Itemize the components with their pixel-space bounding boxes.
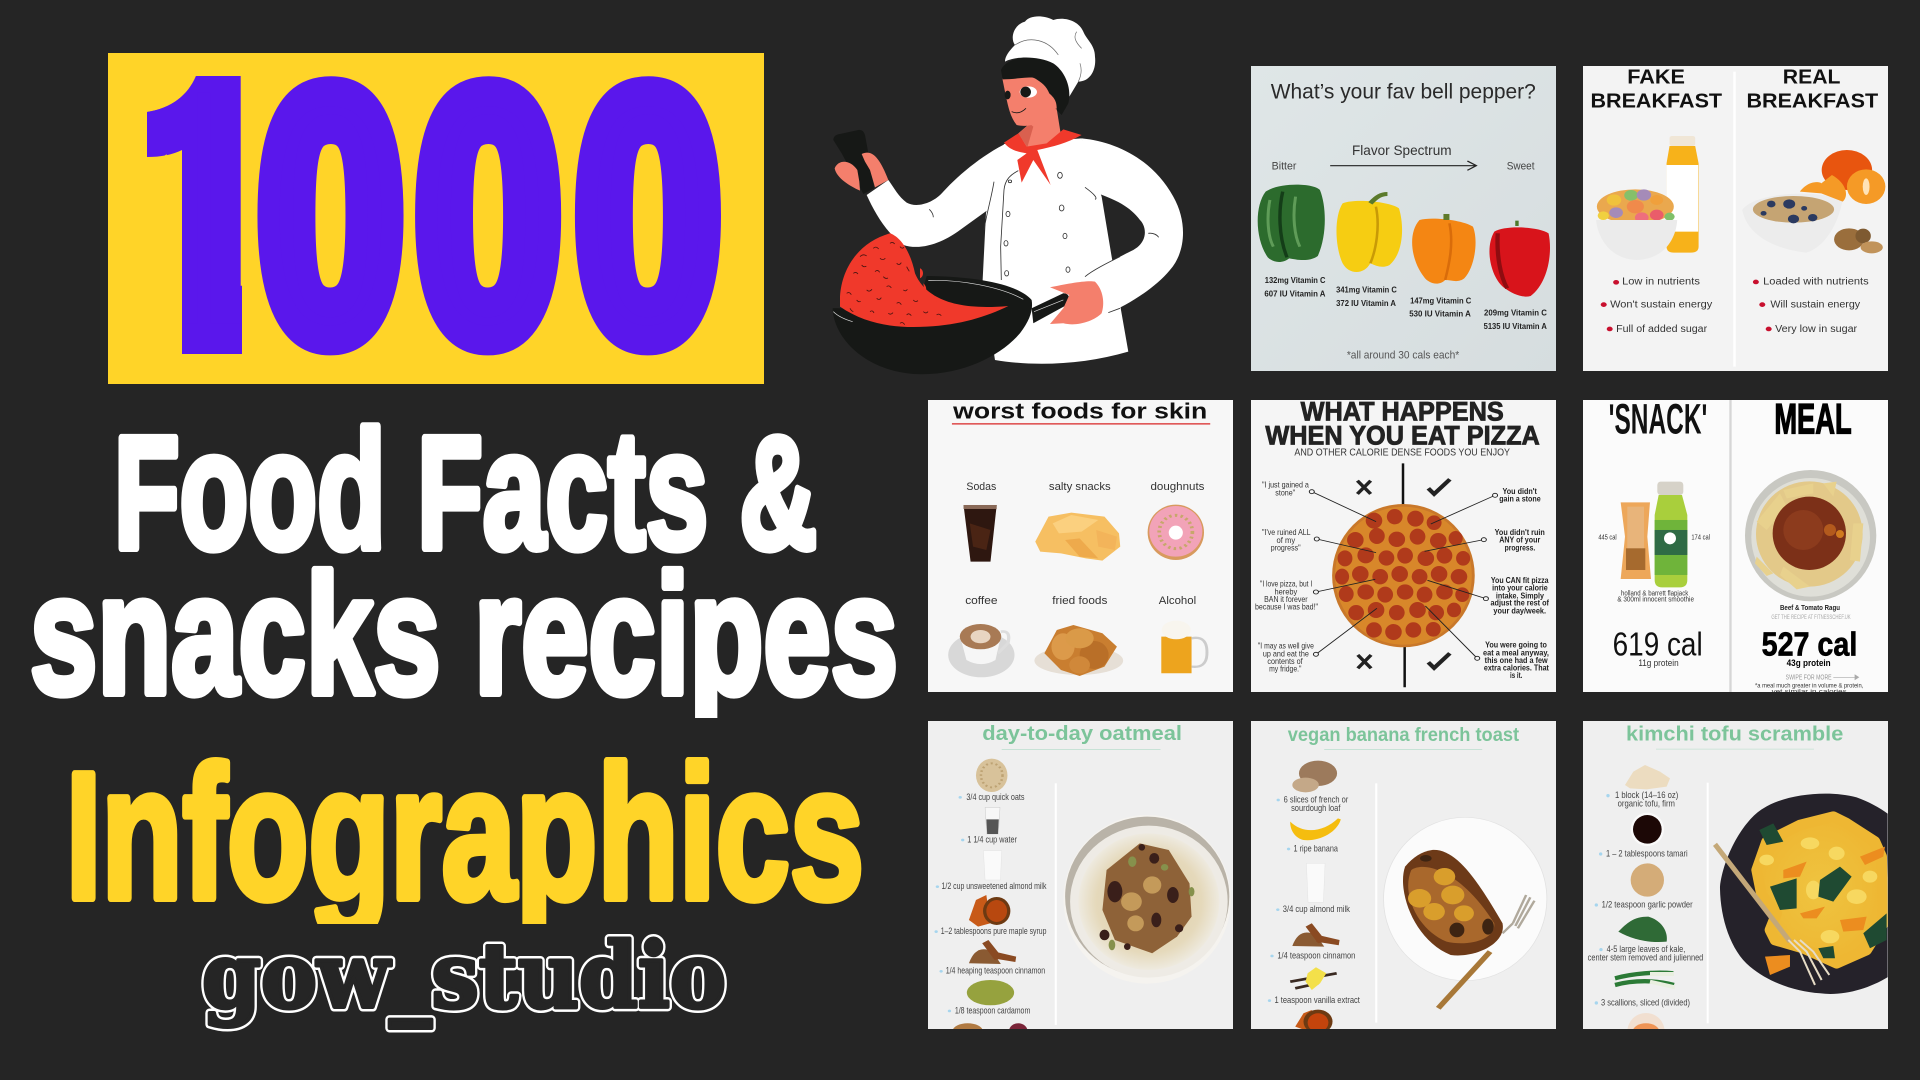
- icon: milk glass: [983, 851, 1002, 880]
- heading underline: [1324, 749, 1482, 750]
- divider: [1729, 400, 1732, 692]
- heading: fake breakfast: BREAKFAST: [1590, 89, 1722, 112]
- panel: day-to-day oatmeal: [928, 721, 1233, 1038]
- left quotes: BAN it forever: [1264, 595, 1308, 604]
- vitamin values: 209mg Vitamin C: [1484, 309, 1547, 318]
- orange and slices: [1800, 150, 1885, 204]
- list: fake breakfast: Low in nutrients: [1622, 277, 1700, 287]
- left quotes: "I've ruined ALL: [1262, 528, 1311, 537]
- dark plate with tofu scramble: [1715, 794, 1898, 994]
- vitamin values: 372 IU Vitamin A: [1336, 299, 1396, 309]
- sauce drops: [920, 268, 937, 303]
- right answers: adjust the rest of: [1490, 599, 1550, 607]
- panel: snack vs meal: [1583, 395, 1888, 696]
- right answers: You were going to: [1485, 641, 1547, 649]
- divider: [1707, 783, 1709, 1023]
- snack calories: 174 cal: [1691, 534, 1710, 541]
- heading underline: [1656, 748, 1814, 751]
- icon: maple syrup crop: [1295, 1010, 1333, 1029]
- vitamin values: 147mg Vitamin C: [1410, 296, 1471, 306]
- list: fake breakfast: Won't sustain energy: [1610, 300, 1713, 310]
- icon: scallions: [1615, 973, 1675, 987]
- icon: smoothie bottle: [1655, 482, 1687, 587]
- icon: potato chips: [1035, 513, 1120, 561]
- title: Infographics: Infographics: [66, 728, 864, 939]
- wok highlights: [833, 280, 1063, 322]
- cereal bowl: [1596, 189, 1677, 260]
- right answers: [1483, 487, 1550, 680]
- icon: sourdough loaf: [1292, 761, 1337, 792]
- right answers: this one had a few: [1485, 656, 1548, 665]
- ingredient list: 1–2 tablespoons pure maple syrup: [941, 926, 1047, 937]
- heading underline: [1002, 749, 1160, 750]
- wok rim and body: [833, 276, 1032, 374]
- heading number 1000: 000: [258, 19, 721, 412]
- left quotes: progress": [1271, 544, 1301, 552]
- jacket details: [929, 171, 1159, 313]
- icon: soda glass: [964, 505, 997, 562]
- right answers: You didn't: [1503, 487, 1537, 496]
- centre axis: [1403, 463, 1405, 687]
- hair: [1001, 58, 1069, 115]
- green pepper: [1258, 185, 1325, 262]
- heading underline: [952, 423, 1210, 425]
- illustration: chef tossing a wok: [833, 16, 1183, 374]
- heading: what happens when you eat pizza: WHAT HAPPENS: [1301, 398, 1504, 427]
- panel: bell pepper flavor spectrum: [1251, 66, 1556, 371]
- snack calories: [1598, 534, 1710, 604]
- meal caption: [1772, 604, 1850, 619]
- icon: garlic powder: [1631, 863, 1664, 897]
- right answers: ANY of your: [1499, 536, 1541, 544]
- heading: what happens when you eat pizza: WHEN YOU EAT PIZZA: [1265, 421, 1540, 451]
- list: real breakfast: Very low in sugar: [1775, 324, 1857, 335]
- ingredient list: 1/8 teaspoon cardamom: [955, 1005, 1030, 1016]
- ingredient list: 3 scallions, sliced (divided): [1601, 997, 1690, 1007]
- vitamin values: [1264, 276, 1547, 332]
- left quotes: [1255, 480, 1318, 673]
- ingredient list: 3/4 cup almond milk: [1283, 904, 1350, 915]
- ingredient list: sourdough loaf: [1291, 803, 1340, 814]
- ingredient list: center stem removed and julienned: [1588, 952, 1703, 962]
- meal caption: Beef & Tomato Ragu: [1780, 605, 1840, 612]
- snack calories: & 300ml innocent smoothie: [1617, 597, 1694, 604]
- list: real breakfast: Loaded with nutrients: [1763, 277, 1869, 287]
- swipe arrow: SWIPE FOR MORE: [1786, 675, 1832, 682]
- ingredient list: [1268, 795, 1360, 1006]
- snack calories: holland & barrett flapjack: [1621, 590, 1689, 597]
- heading: worst foods for skin: worst foods for skin: [952, 400, 1207, 424]
- neck: [1018, 108, 1061, 147]
- ingredient list: 1 – 2 tablespoons tamari: [1606, 848, 1688, 858]
- icon: maple syrup: [969, 895, 1010, 927]
- left sleeve: [867, 140, 1013, 247]
- right answers: extra calories. That: [1484, 663, 1549, 672]
- flavor spectrum arrow: Sweet: [1507, 160, 1535, 172]
- pepper shaker: [833, 130, 874, 194]
- left quotes: up and eat the: [1263, 649, 1309, 658]
- heading: bell pepper question: What’s your fav bell pepper?: [1271, 80, 1536, 104]
- footnote: yet similar in calories: [1772, 689, 1847, 696]
- panel: fake vs real breakfast: [1583, 65, 1888, 371]
- outlined credit: gow_studio: gow_studio: [202, 923, 726, 1029]
- check marks: [1428, 479, 1450, 668]
- snack total: 619 cal: [1613, 627, 1703, 664]
- holding hand: [1050, 281, 1103, 324]
- icon: cinnamon: [1292, 923, 1340, 947]
- heading: fake breakfast: FAKE: [1627, 65, 1685, 88]
- food texture: [847, 242, 941, 325]
- ingredient list: 1/2 cup unsweetened almond milk: [942, 881, 1047, 892]
- icon: tamari bowl: [1631, 813, 1664, 846]
- right answers: eat a meal anyway,: [1483, 648, 1549, 657]
- heading: real breakfast: REAL: [1783, 65, 1840, 88]
- heading number 1000: 1: [108, 0, 284, 429]
- oat bowl: [1742, 194, 1843, 253]
- divider: [1055, 783, 1057, 1025]
- eye and smile: [1005, 86, 1037, 113]
- panel: kimchi tofu scramble: [1583, 721, 1898, 1050]
- meal total: [1762, 631, 1856, 668]
- left quotes: contents of: [1267, 657, 1303, 666]
- icon: pink doughnut: [1148, 505, 1204, 560]
- left quotes: stone": [1275, 488, 1295, 497]
- yellow pepper: [1336, 194, 1402, 272]
- ingredient list: 1 ripe banana: [1294, 843, 1338, 854]
- ingredient list: 1/4 heaping teaspoon cinnamon: [946, 966, 1045, 976]
- footnote: [1755, 683, 1863, 692]
- footnote: *all around 30 cals each*: [1347, 349, 1459, 361]
- wok handle: [1032, 293, 1069, 323]
- icon: coffee cup: [948, 624, 1015, 677]
- list: real breakfast: Will sustain energy: [1770, 300, 1860, 310]
- ingredient list: 3/4 cup quick oats: [966, 792, 1024, 803]
- panel: what happens when you eat pizza: [1251, 398, 1556, 692]
- left quotes: "I may as well give: [1258, 642, 1314, 650]
- right answers: gain a stone: [1499, 495, 1541, 503]
- icon: water glass: [985, 807, 1000, 834]
- ingredient list: [935, 792, 1047, 1016]
- list: fake breakfast: Full of added sugar: [1616, 324, 1707, 335]
- food labels: Sodas: [966, 480, 996, 493]
- food labels: coffee: [965, 594, 998, 607]
- ingredient list: organic tofu, firm: [1618, 798, 1675, 808]
- juice bottle: [1667, 136, 1699, 253]
- right answers: is it.: [1510, 671, 1522, 680]
- vitamin values: 341mg Vitamin C: [1336, 286, 1397, 295]
- ingredient list: [1588, 790, 1703, 1007]
- title: Food Facts &: Food Facts &: [114, 396, 817, 584]
- heading: oatmeal: day-to-day oatmeal: [982, 721, 1182, 744]
- heading: french toast: vegan banana french toast: [1288, 723, 1519, 745]
- list: real breakfast: [1753, 277, 1869, 335]
- oatmeal bowl: [1063, 815, 1231, 984]
- snack total: 11g protein: [1638, 658, 1679, 668]
- ingredient list: 4-5 large leaves of kale,: [1607, 944, 1685, 954]
- icon: fried chicken: [1034, 625, 1123, 676]
- right answers: You didn't ruin: [1495, 528, 1545, 537]
- raised hand: [835, 153, 888, 191]
- bottom ingredient crops: [953, 1023, 1028, 1029]
- snack total: [1614, 632, 1701, 668]
- swipe arrow: [1786, 674, 1860, 680]
- callout lines: [1309, 490, 1498, 660]
- icon: tofu: [1625, 765, 1670, 789]
- right answers: progress.: [1505, 543, 1535, 552]
- ingredient list: 1 block (14–16 oz): [1615, 790, 1678, 800]
- divider: [1375, 783, 1377, 1023]
- icon: cardamom: [967, 980, 1014, 1005]
- ingredient list: 1 teaspoon vanilla extract: [1274, 995, 1360, 1006]
- ingredient list: 1 1/4 cup water: [967, 835, 1017, 845]
- chef hat: [1005, 16, 1095, 97]
- heading: fake breakfast: [1590, 65, 1722, 112]
- red pepper: [1489, 221, 1550, 297]
- footnote: *a meal much greater in volume & protein,: [1755, 683, 1863, 690]
- left quotes: because I was bad!": [1255, 602, 1318, 611]
- badge: 1000: [108, 53, 764, 384]
- chef jacket: [983, 138, 1128, 364]
- left quotes: of my: [1277, 536, 1296, 545]
- flavor spectrum arrow: Bitter: [1272, 160, 1296, 172]
- orange pepper: [1412, 214, 1476, 284]
- icon: vanilla: [1290, 967, 1337, 990]
- icon: kimchi bowl crop: [1627, 1013, 1665, 1050]
- snack calories: 445 cal: [1598, 534, 1617, 541]
- meal total: 527 cal: [1762, 627, 1857, 664]
- left quotes: hereby: [1274, 587, 1298, 596]
- scarf: [1004, 129, 1082, 185]
- ingredient list: 1/4 teaspoon cinnamon: [1277, 950, 1355, 961]
- left quotes: "I love pizza, but I: [1260, 580, 1312, 588]
- divider: [1733, 72, 1736, 367]
- flavor spectrum arrow: Flavor Spectrum: [1352, 143, 1452, 158]
- food labels: fried foods: [1052, 594, 1107, 607]
- meal plate with beef ragu: [1745, 470, 1876, 601]
- right sleeve: [1082, 138, 1183, 313]
- vitamin values: 132mg Vitamin C: [1265, 276, 1325, 286]
- icon: banana: [1290, 818, 1341, 840]
- icon: cinnamon: [969, 940, 1016, 964]
- icon: oats: [976, 759, 1007, 792]
- icon: flapjack bar: [1621, 502, 1651, 579]
- heading: what happens when you eat pizza: [1265, 398, 1540, 451]
- panel: vegan banana french toast: [1251, 721, 1556, 1034]
- heading: snack: 'SNACK': [1609, 395, 1707, 443]
- right answers: into your calorie: [1492, 584, 1548, 592]
- meal total: 43g protein: [1787, 658, 1831, 668]
- right answers: You CAN fit pizza: [1491, 576, 1549, 585]
- face: [1002, 77, 1065, 126]
- right answers: your day/week.: [1493, 606, 1546, 615]
- icon: beer mug: [1161, 621, 1207, 673]
- meal caption: GET THE RECIPE AT FITNESSCHEF.UK: [1771, 614, 1851, 621]
- heading: real breakfast: BREAKFAST: [1746, 89, 1878, 112]
- icon: kale: [1618, 917, 1667, 942]
- food labels: doughnuts: [1151, 480, 1204, 493]
- flavor spectrum arrow: [1272, 143, 1535, 172]
- vitamin values: 607 IU Vitamin A: [1264, 289, 1325, 299]
- panel: worst foods for skin: [928, 400, 1233, 692]
- heading number 1000: [147, 76, 721, 356]
- vitamin values: 5135 IU Vitamin A: [1484, 322, 1547, 332]
- food labels: salty snacks: [1049, 480, 1111, 493]
- plate with french toast: [1384, 817, 1547, 1008]
- left quotes: "I just gained a: [1262, 480, 1310, 489]
- pizza: [1332, 504, 1475, 647]
- heading: meal: MEAL: [1774, 395, 1852, 443]
- food labels: Alcohol: [1159, 594, 1196, 607]
- ingredient list: 1/2 teaspoon garlic powder: [1602, 899, 1693, 909]
- heading: kimchi: kimchi tofu scramble: [1626, 723, 1843, 746]
- heading: real breakfast: [1746, 65, 1878, 112]
- walnuts: [1834, 228, 1883, 253]
- left quotes: my fridge.": [1269, 665, 1301, 673]
- list: fake breakfast: [1601, 277, 1713, 335]
- tossed food: [840, 233, 1008, 327]
- right answers: intake. Simply: [1496, 591, 1544, 600]
- icon: milk glass: [1306, 863, 1325, 902]
- subheading: AND OTHER CALORIE DENSE FOODS YOU ENJOY: [1294, 448, 1510, 458]
- ingredient list: 6 slices of french or: [1284, 795, 1349, 805]
- outlined credit: gow_studio: gow_studio: [202, 923, 726, 1029]
- food labels: [965, 480, 1204, 607]
- vitamin values: 530 IU Vitamin A: [1409, 310, 1471, 319]
- cross marks: [1357, 481, 1371, 668]
- title: snacks recipes: snacks recipes: [30, 540, 898, 730]
